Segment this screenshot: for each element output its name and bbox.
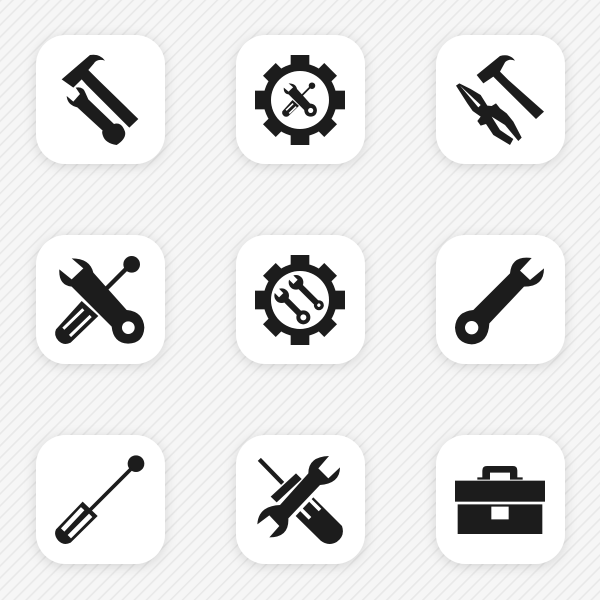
card [436, 235, 565, 364]
icon: gear with wrenches [255, 255, 345, 345]
panel: wrench over screwdriver [236, 435, 365, 564]
panel: pliers and hammer [436, 35, 565, 164]
icon: hammer [477, 55, 544, 119]
panel: screwdriver [36, 435, 165, 564]
icon: pliers [456, 83, 522, 145]
icon: wrench [455, 258, 544, 344]
icon: screwdriver [55, 455, 144, 544]
card [236, 35, 365, 164]
icon: wrench over screwdriver [257, 456, 343, 544]
card [236, 235, 365, 364]
panel: gear with wrenches [236, 235, 365, 364]
panel: hammer and wrench [36, 35, 165, 164]
icon: gear with crossed tools [255, 55, 345, 145]
card [236, 435, 365, 564]
panel: wrench [436, 235, 565, 364]
card [36, 435, 165, 564]
panel: toolbox [436, 435, 565, 564]
panel: gear with crossed tools [236, 35, 365, 164]
panel: crossed wrench and screwdriver [36, 235, 165, 364]
card [36, 35, 165, 164]
icon: hammer and wrench [62, 55, 138, 145]
card [436, 435, 565, 564]
icon: toolbox [455, 466, 545, 534]
card [36, 235, 165, 364]
icon: crossed wrench and screwdriver [55, 256, 144, 344]
card [436, 35, 565, 164]
